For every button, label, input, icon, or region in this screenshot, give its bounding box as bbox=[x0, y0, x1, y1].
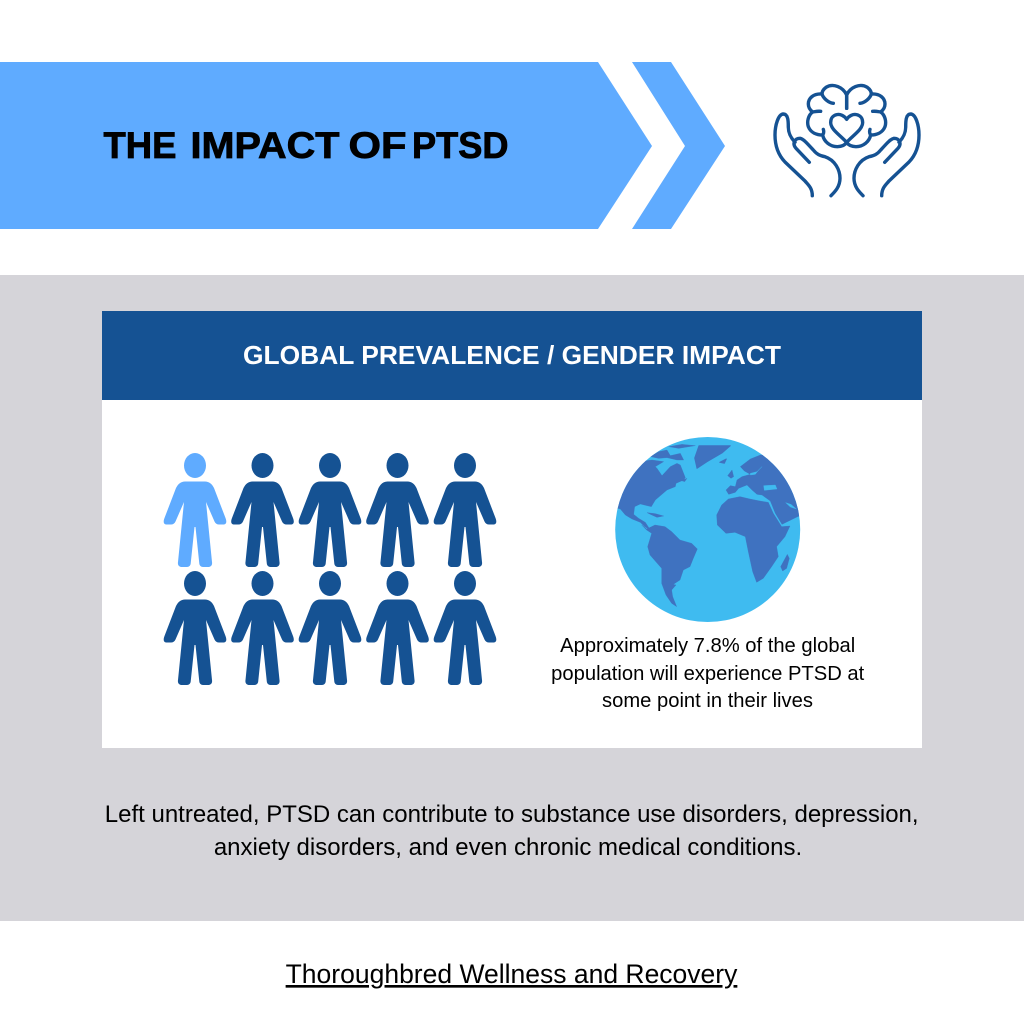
title: OF bbox=[348, 125, 406, 166]
footer: Thoroughbred Wellness and Recovery bbox=[286, 959, 738, 989]
iceland bbox=[720, 459, 726, 463]
title banner arrow bbox=[0, 62, 652, 229]
north america and arctic bbox=[612, 444, 695, 530]
body text: anxiety disorders, and even chronic medical conditions. bbox=[214, 834, 802, 861]
panel heading: GLOBAL PREVALENCE / GENDER IMPACT bbox=[243, 342, 781, 370]
title: IMPACT bbox=[190, 125, 340, 166]
person row 2 bbox=[164, 571, 496, 685]
globe caption: Approximately 7.8% of the global bbox=[560, 635, 855, 657]
title bbox=[104, 125, 508, 166]
greenland bbox=[695, 446, 730, 468]
person row 1 bbox=[231, 453, 496, 567]
panel header bbox=[102, 311, 922, 400]
africa bbox=[717, 497, 790, 582]
icon: hands holding brain and heart bbox=[775, 85, 919, 196]
title: THE bbox=[104, 125, 176, 166]
people chart: 1 in 10 bbox=[164, 453, 496, 685]
title: PTSD bbox=[412, 125, 508, 166]
panel: global prevalence bbox=[102, 311, 922, 748]
background band bbox=[0, 275, 1024, 921]
right hand bbox=[854, 114, 919, 196]
globe caption: population will experience PTSD at bbox=[551, 663, 865, 685]
eurasia and arabia bbox=[726, 455, 807, 524]
body text: Left untreated, PTSD can contribute to substance use disorders, depression, bbox=[105, 801, 919, 828]
icon: globe bbox=[612, 437, 807, 622]
left hand bbox=[775, 114, 840, 196]
brain and heart bbox=[808, 85, 886, 147]
highlighted person bbox=[164, 453, 226, 567]
south america and madagascar bbox=[642, 525, 789, 607]
panel body bbox=[102, 311, 922, 748]
globe caption: some point in their lives bbox=[602, 690, 813, 712]
secondary chevron bbox=[632, 62, 725, 229]
